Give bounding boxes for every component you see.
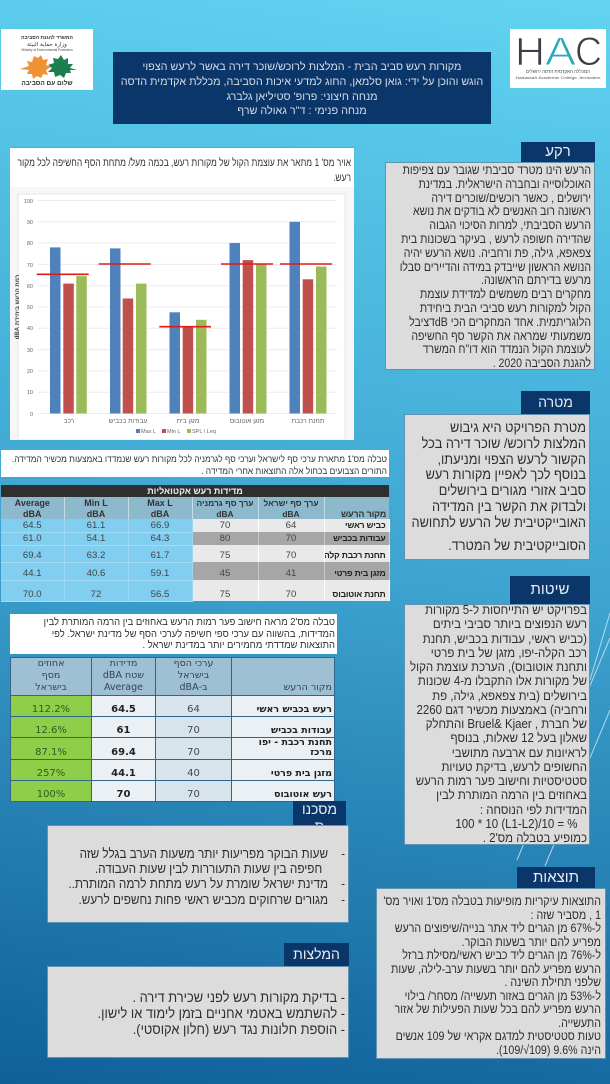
table 2: percent gap: רעש אוטובוס [274, 789, 332, 800]
panel: background: צפאפא, גילה, פת ורחביה. נושא הרעש יהיה [404, 246, 591, 260]
panel: goal: סביב אזורי מגורים בירושלים [439, 483, 586, 499]
table 1: acoustic measurements: Max L [147, 498, 173, 508]
logo: ministry of environmental protection: המשרד להגנת הסביבה [21, 34, 73, 41]
panel: methods: ורחביה) באמצעות מכשיר דגם 2260 [417, 703, 587, 717]
panel: goal: האובייקטיבית של הרעש לתחושה [412, 515, 586, 531]
table 2: percent gap: 70 [187, 747, 200, 758]
panel: background: ירושלים , כאשר רוכשים/שוכרים דירה [431, 191, 591, 205]
table 1: acoustic measurements [1, 485, 390, 602]
y axis numbers: 50 [27, 305, 33, 311]
logo: HAC college [510, 29, 606, 88]
table 2: percent gap: שטח dBA [103, 670, 144, 681]
table 2: percent gap: אחוזים [38, 658, 64, 669]
table 2: percent gap: מסף [42, 670, 60, 681]
table 2 caption: התוצאות שמדדתי מחמירים יותר במדינת ישראל . [142, 640, 335, 651]
table 1: acoustic measurements: 75 [220, 550, 230, 561]
panel: background: הנושא הראשון שייבדק במידה והדיירים סבלו [400, 260, 591, 274]
panel: methods: כמופיע בטבלה מס'2 . [483, 831, 587, 845]
table 2: percent gap: מרכז [310, 747, 332, 758]
panel: methods: המדידות לפי הנוסחה : [480, 802, 587, 816]
table 1: acoustic measurements: 72 [91, 588, 101, 600]
category labels: עבודות בכביש [109, 418, 147, 425]
table 1: acoustic measurements: 69.4 [23, 550, 42, 560]
table 2: percent gap: מזגן בית פרטי [271, 768, 332, 779]
panel: recommendations [47, 966, 349, 1058]
table 2: percent gap: רעש בכביש ראשי [257, 704, 332, 715]
table 1: acoustic measurements: 63.2 [87, 550, 105, 560]
panel: recommendations: - הוספת חלונות נגד רעש (חלון אקוסטי). [133, 1021, 345, 1037]
y axis numbers: 20 [27, 369, 33, 375]
table 1: acoustic measurements: 44.1 [23, 568, 42, 578]
panel: results: 1 , מסביר שזה : [531, 908, 601, 922]
category labels: רכב [64, 418, 74, 425]
heading: recommendations: המלצות [293, 946, 340, 962]
table 2: percent gap: עבודות בכביש [271, 725, 332, 736]
panel: methods: 100 * 10 (L1-L2)/10 = % [455, 817, 577, 831]
panel: goal: הקשור לרעש הצפוי ומניעתו, [437, 452, 586, 468]
table 1: acoustic measurements: מזגן בית פרטי [334, 568, 386, 578]
panel: results: ל-53% מן הגרים באזור תעשייה/ מסחר/ בילוי [405, 988, 601, 1002]
panel: background: האוכלוסייה ובחברה הישראלית. במדינת [419, 177, 591, 191]
panel: background: מחקרים רבים משמשים למדידת עוצמת [420, 287, 591, 301]
table 2: percent gap [10, 657, 335, 802]
table 2: percent gap: מקור הרעש [284, 682, 332, 693]
category labels: תחנת רכבת [292, 418, 324, 425]
y axis title: רמת הרעש ביחידת dBA [15, 275, 21, 339]
panel: conclusions: - שעות הבוקר מפריעות יותר משעות הערב בגלל שזה [80, 846, 345, 861]
title [113, 52, 491, 124]
panel: goal: בנוסף לכך לאפיין מקורות רעש [426, 467, 586, 483]
panel: goal [404, 414, 590, 560]
min bars [63, 260, 313, 414]
table 2: percent gap: 44.1 [111, 768, 136, 779]
logo: ministry of environmental protection [1, 29, 93, 90]
panel: goal: המלצות לרוכש/ שוכר דירה בכל [422, 436, 586, 452]
panel: methods: רעש הנפוצים ביותר סביבי ביתים [433, 617, 587, 631]
table 2: percent gap: 61 [117, 725, 130, 736]
table 1: acoustic measurements: תחנת אוטובוס [332, 589, 386, 599]
y axis numbers: 30 [27, 348, 33, 354]
y axis numbers: 80 [27, 241, 33, 247]
panel: recommendations: - בדיקת מקורות רעש לפני שכירת דירה . [132, 989, 345, 1005]
table 2: percent gap: 12.6% [35, 725, 67, 736]
title: מנחה פנימי : ד"ר גאולה שרף [237, 105, 367, 117]
figure 1 caption: אויר מס' 1 מתאר את עוצמת הקול של מקורות רעש, בכמה מעל/ מתחת הסף החשיפה לכל מקור [17, 157, 351, 169]
panel: background: ראשונה רוב האנשים לא בודקים את נושא [413, 204, 591, 218]
panel: conclusions: - מדינת ישראל שומרת על רעש מתחת לרמה המותרת.. [68, 876, 345, 891]
heading: conclusions [293, 801, 346, 825]
panel: results: מפריע להם יותר בשעות הבוקר. [462, 934, 601, 948]
table 2: percent gap: Average [104, 682, 143, 693]
heading: results [517, 867, 595, 888]
legend: Min L [167, 429, 180, 435]
table 2: percent gap: ב-dBA [180, 682, 207, 693]
panel: methods: סטטיסטיות וחישוב פער רמות הרעש [416, 774, 587, 788]
panel: background: מרעש בדירתם הראשונה. [481, 273, 591, 287]
table 2: percent gap: בישראל [35, 682, 67, 693]
table 1 caption: התורים הצבועים בכחול אלה התוצאות אחרי המדידה . [201, 464, 387, 476]
table 2: percent gap: 70 [117, 789, 130, 800]
table 1: acoustic measurements: dBA [23, 508, 42, 518]
heading: results: תוצאות [533, 869, 579, 886]
heading: conclusions: מסכנו [302, 801, 337, 817]
panel: background: הלוגריתמית. אחד המחקרים הכי dBדציבל [409, 315, 591, 329]
y axis numbers: 0 [30, 412, 33, 418]
panel: methods: ותחנת אוטובוס), הערכת עוצמת הקול [410, 660, 587, 674]
y axis numbers: 100 [24, 199, 33, 205]
panel: results: התוצאות עיקריות מופיעות בטבלה מס'1 ואויר מס' [383, 894, 601, 908]
panel: methods: רכב הקלה-יפו, מזגן של בית פרטי [431, 646, 587, 660]
table 1: acoustic measurements: 70.0 [23, 588, 42, 600]
panel: methods: בירושלים (בית צפאפא, גילה, פת [432, 688, 587, 702]
table 1: acoustic measurements: 80 [220, 533, 230, 544]
panel: results: ל-76% מן הגרים ליד כביש ראשי/מסילת ברזל [402, 948, 601, 962]
panel: results [376, 888, 606, 1059]
table 1: acoustic measurements: מקור הרעש [341, 508, 386, 518]
table 1: acoustic measurements: Average [15, 498, 50, 508]
logo: HAC college: C [575, 30, 602, 74]
table 2: percent gap: 70 [187, 789, 200, 800]
panel: results: שלפני תחילת השינה . [504, 975, 601, 989]
heading: background: רקע [545, 143, 571, 160]
title: מקורות רעש סביב הבית - המלצות לרוכש/שוכר דירה באשר לרעש הצפוי [143, 61, 461, 73]
table 1: acoustic measurements: 56.5 [151, 588, 169, 600]
panel: recommendations: - להשתמש באטמי אחניים בזמן לימוד או לישון. [98, 1005, 345, 1021]
panel: results: הרעש מפריע להם בכל שעות הפעילות של אזור [395, 1002, 601, 1016]
y axis numbers: 40 [27, 326, 33, 332]
table 2: percent gap: ערכי הסף [174, 658, 213, 669]
table 2: percent gap: 64.5 [111, 704, 136, 715]
y axis numbers: 90 [27, 220, 33, 226]
table 1: acoustic measurements: 75 [220, 589, 230, 600]
panel: background: הרעש הינו מטרד סביבתי שגובר עם צפיפות [403, 163, 591, 177]
table 1: acoustic measurements: 45 [220, 568, 230, 579]
panel: background: הרעש הסביבתי, למרות הסיכוי הגבוה [429, 218, 591, 232]
logo: ministry of environmental protection: שלום עם הסביבה [21, 79, 73, 87]
table 1: acoustic measurements: כביש ראשי [345, 520, 386, 530]
panel: goal: מטרת הפרויקט היא גיבוש [450, 420, 586, 436]
table 1: acoustic measurements: dBA [216, 508, 234, 518]
logo: ministry of environmental protection: Ministry of Environmental Protection [21, 48, 73, 52]
figure 1 caption [10, 147, 354, 187]
category labels: מזגן בית [177, 418, 199, 425]
heading: goal [521, 391, 590, 414]
table 1: acoustic measurements: עבודות בכביש [333, 533, 386, 543]
table 2: percent gap: 257% [37, 768, 65, 779]
panel: background: הקול למקורות רעש סביבי הבית ביחידת [420, 301, 591, 315]
table 1: acoustic measurements: dBA [282, 508, 300, 518]
heading: background [521, 142, 595, 162]
heading: recommendations [284, 943, 349, 966]
heading: goal: מטרה [538, 394, 573, 410]
table 1 caption: טבלה מס'1 מתארת ערכי סף לישראל וערכי סף לגרמניה לכל מקורות רעש שנמדדו באמצעות מכשיר המדידה. [12, 453, 387, 464]
heading: methods: שיטות [531, 581, 569, 598]
table 1: acoustic measurements: 61.7 [151, 550, 169, 560]
table 1: acoustic measurements: 70 [286, 533, 296, 544]
panel: results: ל-67% מן הגרים ליד אתר בנייה/שיפוצים הרעש [395, 921, 601, 935]
panel: background: שהדירה חשופה לרעש , בעיקר בשכונות בית [401, 232, 591, 246]
panel: methods: של חברת , Bruel& Kjaer והתחלק [426, 717, 587, 731]
legend [136, 429, 216, 435]
table 1: acoustic measurements: dBA [87, 508, 105, 518]
panel: background: לעוצמת הקול הנמדד הוא דו"ח המשרד [423, 342, 591, 356]
table 2: percent gap: 69.4 [111, 747, 136, 758]
table 1: acoustic measurements: 59.1 [151, 568, 169, 578]
table 1: acoustic measurements: 40.6 [87, 568, 105, 578]
heading: methods [510, 576, 590, 604]
panel: goal: הסובייקטיבית של המטרד. [448, 538, 586, 554]
average bars [76, 264, 326, 414]
table 1: acoustic measurements: מדידות רעש אקטואליות [147, 486, 243, 496]
panel: results: הרעש מפריע להם יותר בשעות ערב-לילה, שעות [391, 962, 601, 976]
table 2: percent gap: 100% [37, 789, 65, 800]
table 1: acoustic measurements: ערך סף ישראל [263, 498, 319, 508]
y axis numbers: 10 [27, 390, 33, 396]
threshold lines [37, 264, 332, 327]
table 2: percent gap: 112.2% [32, 704, 70, 715]
legend: Max L [141, 429, 156, 435]
y axis numbers: 70 [27, 263, 33, 269]
panel: results: הינה 9.6% (109√/109). [496, 1042, 601, 1056]
table 1: acoustic measurements: תחנת רכבת קלה [324, 550, 386, 560]
table 1: acoustic measurements: 41 [286, 568, 296, 579]
table 1: acoustic measurements: 61.0 [23, 532, 42, 544]
table 1: acoustic measurements: dBA [151, 508, 169, 518]
table 1 caption [1, 450, 389, 477]
logo: ministry of environmental protection: وزارة حماية البيئة [27, 42, 67, 48]
table 2: percent gap: בישראל [178, 670, 209, 681]
category labels: מזגן אוטובוס [230, 418, 264, 425]
y axis numbers [24, 199, 33, 418]
panel: methods: לראיונות עם ארבעה מתושבי [452, 746, 587, 760]
panel: results: התעשייה. [558, 1016, 601, 1030]
logo: HAC college: A [545, 30, 576, 74]
title: מנחה חיצוני: פרופ' סטיליאן גלברג [226, 91, 378, 103]
panel: background: משמעותי שמראה את הקשר סף החשיפה [411, 329, 591, 343]
table 2 caption [10, 614, 337, 654]
panel: methods: החשופים לרעש, בדיקת טעויות [441, 760, 587, 774]
table 2: percent gap: 70 [187, 725, 200, 736]
panel: background: להגנת הסביבה 2020 . [493, 356, 591, 370]
table 2: percent gap: מדידות [110, 658, 137, 669]
y axis numbers: 60 [27, 284, 33, 290]
bar chart [10, 187, 354, 440]
legend: SPL \ Leq [192, 429, 216, 435]
table 1: acoustic measurements: 61.1 [87, 520, 105, 530]
panel: methods [404, 604, 590, 845]
table 2 caption: המדידות, בהשווה עם ערכי ספי חשיפה לערכי הסף של מדינת ישראל. לפי [52, 629, 335, 640]
logo: HAC college: H [515, 30, 545, 74]
panel: methods: באחוזים בין הרמה המותרת לבין [436, 788, 587, 802]
max bars [50, 222, 300, 414]
table 2: percent gap: 64 [187, 704, 200, 715]
panel: conclusions: חפיפה בין שעות התעוררות לבין שעות העבודה. [95, 861, 322, 876]
table 2: percent gap: 40 [187, 768, 200, 779]
table 1: acoustic measurements: 64 [286, 520, 296, 531]
figure 1 caption: רעש. [333, 172, 351, 184]
panel: methods: שאלון בעל 12 שאלות, בנוסף [450, 731, 587, 745]
table 2 caption: טבלה מס'2 מראה חישוב פער רמות הרעש באחוזים בין הרמה המותרת לבין [44, 617, 335, 628]
logo: HAC college: Hadassah Academic College Jerusalem [516, 75, 601, 80]
title: הוגש והוכן על ידי: גואן סלמאן, החוג למדעי איכות הסביבה, מכללת אקדמית הדסה [121, 76, 483, 88]
panel: methods: (כביש ראשי, עבודות בכביש, תחנת [423, 632, 587, 646]
category labels [64, 418, 324, 425]
table 1: acoustic measurements: 70 [220, 520, 230, 531]
table 1: acoustic measurements: 64.3 [151, 532, 169, 544]
logo: HAC college: המכללה האקדמית הדסה ירושלים [526, 69, 590, 74]
panel: conclusions [47, 825, 349, 923]
panel: methods: של מקורות אלו התקבלו מ-4 שכונות [418, 674, 587, 688]
table 1: acoustic measurements: 54.1 [87, 532, 105, 544]
panel: conclusions: - מגורים שרחוקים מכביש ראשי פחות נחשפים לרעש. [79, 892, 345, 907]
table 1: acoustic measurements: 64.5 [23, 520, 42, 530]
table 2: percent gap: 87.1% [35, 747, 67, 758]
panel: goal: ולבדוק את הקשר בין המדידה [432, 499, 586, 515]
table 1: acoustic measurements: 70 [286, 589, 296, 600]
panel: results: טעות סטטיסטית למדגם אקראי של 109 אנשים [396, 1029, 601, 1043]
table 1: acoustic measurements: Min L [84, 498, 108, 508]
table 1: acoustic measurements: ערך סף גרמניה [197, 498, 253, 508]
table 1: acoustic measurements: 70 [286, 550, 296, 561]
panel: background [385, 162, 595, 370]
table 1: acoustic measurements: 66.9 [151, 520, 169, 530]
